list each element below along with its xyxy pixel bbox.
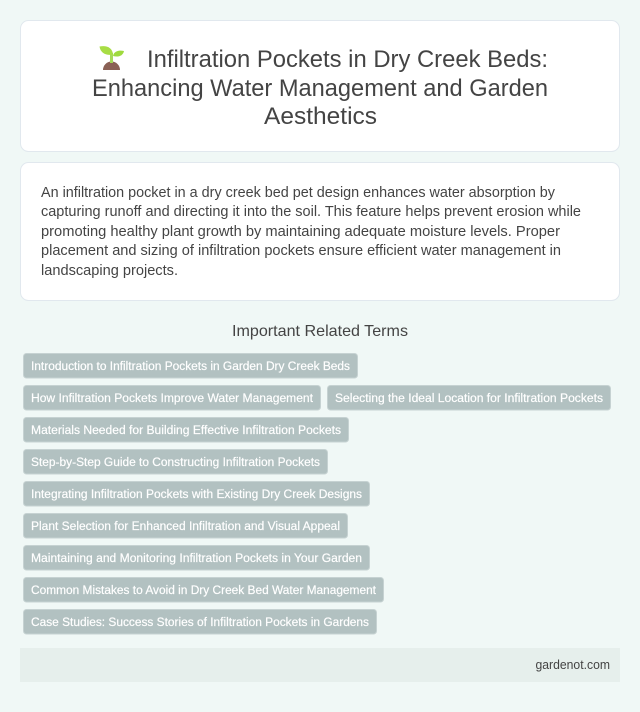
title text: Infiltration Pockets in Dry Creek Beds: (147, 46, 548, 73)
panel: description card (20, 162, 620, 300)
panel: related term tags (24, 354, 610, 634)
tag 7: Plant Selection for Enhanced Infiltration and Visual Appeal (31, 519, 340, 533)
tag 8 (24, 546, 370, 570)
tag 2 (24, 386, 320, 410)
tag 2: How Infiltration Pockets Improve Water Management (31, 391, 314, 405)
tag 3 (328, 386, 610, 410)
tag 6 (24, 482, 370, 506)
description text: placement and sizing of infiltration pockets ensure efficient water management in (41, 243, 561, 259)
panel: footer (20, 648, 620, 682)
icon: seedling (100, 46, 124, 70)
tag 9: Common Mistakes to Avoid in Dry Creek Bed Water Management (31, 583, 377, 597)
title text (92, 46, 548, 130)
footer source text: gardenot.com (536, 658, 610, 672)
tag 9 (24, 578, 384, 602)
description text: capturing runoff and directing it into the soil. This feature helps prevent erosion while (41, 204, 581, 220)
tag 10: Case Studies: Success Stories of Infiltration Pockets in Gardens (31, 615, 369, 629)
description text (41, 185, 581, 279)
heading: related terms: Important Related Terms (232, 323, 408, 340)
tag 10 (24, 610, 376, 634)
tag 1 (24, 354, 358, 378)
tag 5 (24, 450, 328, 474)
description text: An infiltration pocket in a dry creek bed pet design enhances water absorption by (41, 185, 556, 201)
tag 4 (24, 418, 348, 442)
tag 3: Selecting the Ideal Location for Infiltration Pockets (335, 391, 603, 405)
tag 4: Materials Needed for Building Effective Infiltration Pockets (31, 423, 341, 437)
tag 6: Integrating Infiltration Pockets with Existing Dry Creek Designs (31, 487, 362, 501)
panel: title card (20, 20, 620, 152)
tag 1: Introduction to Infiltration Pockets in Garden Dry Creek Beds (31, 359, 350, 373)
tag 5: Step-by-Step Guide to Constructing Infiltration Pockets (31, 455, 320, 469)
tag 8: Maintaining and Monitoring Infiltration Pockets in Your Garden (31, 551, 362, 565)
tag 7 (24, 514, 348, 538)
description text: landscaping projects. (41, 263, 178, 279)
description text: promoting healthy plant growth by maintaining adequate moisture levels. Proper (41, 224, 560, 240)
title text: Aesthetics (264, 103, 377, 130)
title text: Enhancing Water Management and Garden (92, 75, 548, 102)
